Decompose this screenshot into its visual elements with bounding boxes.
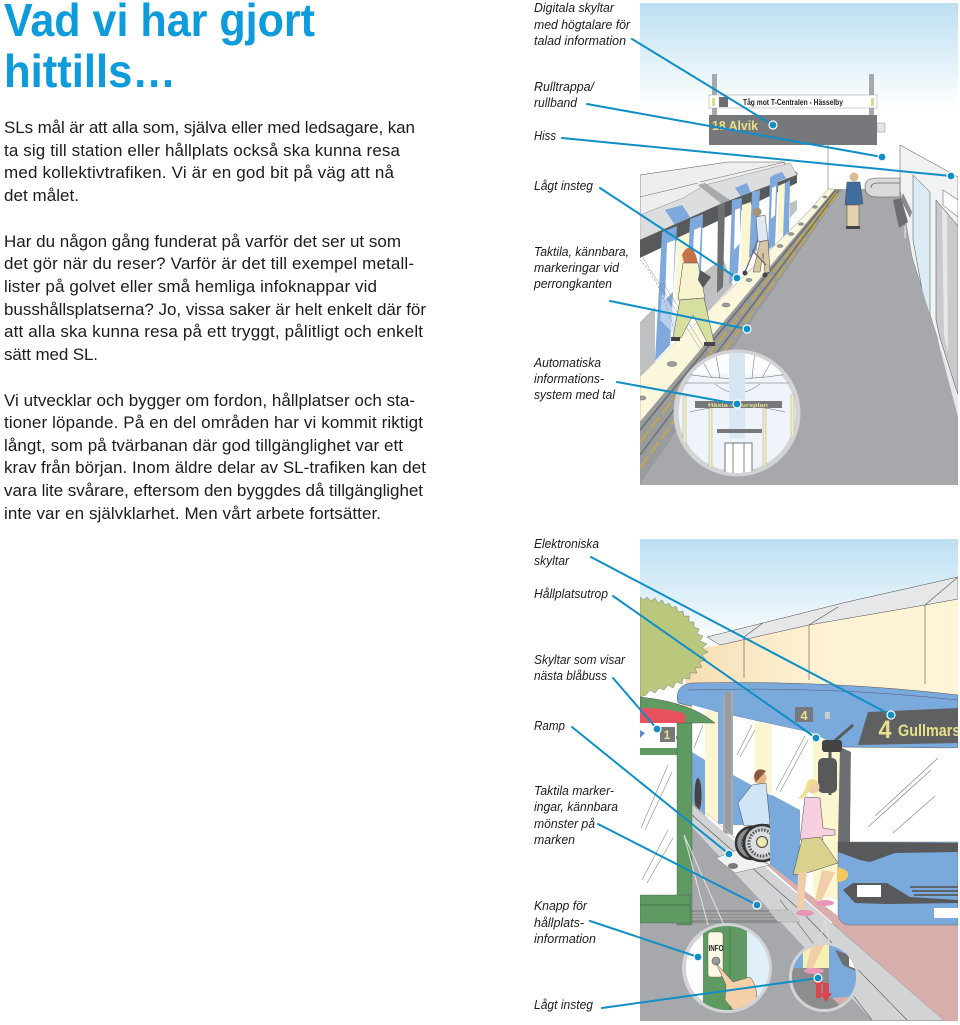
title — [4, 0, 315, 97]
label group: metro platform: Lågt insteg — [534, 178, 594, 193]
intro paragraph — [4, 118, 415, 205]
bus shelter — [640, 697, 715, 925]
illustration: bus stop — [640, 539, 960, 1021]
label group: bus stop: Taktila marker- — [534, 783, 615, 798]
label group: metro platform: markeringar vid — [534, 260, 620, 275]
intro paragraph: det målet. — [4, 186, 79, 205]
intro paragraph: ta sig till station eller hållplats också ska kunna resa — [4, 141, 401, 160]
label group: bus stop: Hållplatsutrop — [534, 586, 608, 601]
intro paragraph: med kollektivtrafiken. Vi är en god bit på väg att nå — [4, 163, 395, 182]
bus side — [677, 682, 958, 900]
paragraph: why things look as they do: att alla ska kunna resa på ett tryggt, pålitligt och enkelt — [4, 322, 423, 341]
label group: bus stop: Skyltar som visar — [534, 652, 626, 667]
label group: bus stop: Lågt insteg — [534, 997, 594, 1012]
label group: metro platform — [533, 0, 631, 402]
label group: metro platform: system med tal — [534, 387, 616, 402]
label group: metro platform: informations- — [534, 371, 605, 386]
label group: bus stop: skyltar — [534, 553, 570, 568]
magnifier: info button — [684, 925, 772, 1015]
magnifier: info button: INFO — [708, 944, 724, 953]
label group: bus stop: Ramp — [534, 718, 565, 733]
label group: metro platform: perrongkanten — [533, 276, 612, 291]
leader lines: bus stop — [572, 557, 895, 1008]
magnifier: in-train information display: Hästa - Djursplan — [708, 403, 768, 409]
label group: bus stop: mönster på — [534, 816, 595, 831]
bus shelter: 1 — [664, 728, 671, 742]
label group: bus stop: nästa blåbuss — [534, 668, 607, 683]
paragraph: why things look as they do: busshållsplatserna? Jo, vissa saker är helt enkelt där för — [4, 300, 426, 319]
person: man waiting — [845, 172, 863, 229]
label group: bus stop: Elektroniska — [534, 536, 599, 551]
bench — [893, 193, 912, 238]
paragraph: why things look as they do: det gör när du reser? Varför är det till exempel metall- — [4, 254, 414, 273]
person: woman walking — [671, 248, 715, 346]
paragraph: why things look as they do: lister på golvet eller små hemliga infoknappar vid — [4, 277, 377, 296]
paragraph: why things look as they do — [4, 232, 426, 364]
label group: bus stop: marken — [534, 832, 575, 847]
paragraph: ongoing work: inte var en självklarhet. Men vårt arbete fortsätter. — [4, 504, 381, 523]
label group: bus stop: hållplats- — [534, 915, 585, 930]
paragraph: ongoing work: Vi utvecklar och bygger om fordon, hållplatser och sta- — [4, 391, 415, 410]
ground — [640, 800, 958, 1021]
label group: metro platform: rullband — [534, 95, 578, 110]
paragraph: why things look as they do: sätt med SL. — [4, 345, 98, 364]
paragraph: why things look as they do: Har du någon gång funderat på varför det ser ut som — [4, 232, 401, 251]
intro paragraph: SLs mål är att alla som, själva eller med ledsagare, kan — [4, 118, 415, 137]
paragraph: ongoing work: långt, som på tvärbanan där god tillgänglighet var ett — [4, 436, 403, 455]
title: hittills… — [4, 45, 176, 97]
escalator — [865, 178, 900, 197]
overhead signs: 18 Alvik — [712, 118, 759, 133]
label group: bus stop: ingar, kännbara — [534, 799, 618, 814]
overhead signs: Tåg mot T-Centralen - Hässelby — [743, 98, 843, 107]
lines to magnifiers — [684, 835, 830, 946]
leader lines: metro platform — [562, 39, 955, 408]
train — [640, 162, 797, 377]
label group: bus stop: Knapp för — [534, 898, 588, 913]
label group: metro platform: Digitala skyltar — [534, 0, 615, 15]
tactile strip — [640, 189, 843, 485]
bus windscreen and mirror — [818, 725, 958, 843]
magnifier: low step — [790, 944, 858, 1010]
dashed door outline — [640, 258, 712, 360]
cream platform edge — [640, 189, 835, 422]
platform studs — [638, 196, 827, 400]
label group: metro platform: Automatiska — [533, 355, 601, 370]
person: wheelchair user — [734, 769, 770, 862]
person: woman boarding — [793, 779, 838, 916]
illustration: right wall and elevator — [900, 145, 958, 440]
label group: bus stop: information — [534, 931, 596, 946]
label group: metro platform: Taktila, kännbara, — [534, 244, 629, 259]
paragraph: ongoing work: krav från början. Inom äldre delar av SL-trafiken kan det — [4, 458, 426, 477]
paragraph: ongoing work — [4, 391, 426, 523]
paragraph: ongoing work: vara lite svårare, eftersom den byggdes då tillgänglighet — [4, 481, 423, 500]
overhead signs — [709, 74, 885, 145]
person: man with walker — [742, 208, 770, 278]
bus shelter: min — [676, 735, 685, 741]
bus destination sign — [858, 708, 960, 745]
illustration: metro platform — [638, 3, 958, 485]
label group: metro platform: med högtalare för — [534, 17, 631, 32]
label group: metro platform: Hiss — [534, 128, 556, 143]
label group: metro platform: talad information — [534, 33, 626, 48]
bus destination sign: 4 — [878, 716, 892, 744]
building — [680, 577, 958, 720]
bus front — [837, 842, 958, 925]
paragraph: ongoing work: tioner löpande. På en del områden har vi kommit riktigt — [4, 413, 423, 432]
bus side: 4 — [800, 708, 808, 723]
tree — [640, 597, 708, 697]
magnifier: in-train information display — [676, 350, 798, 478]
label group: bus stop — [534, 536, 626, 1012]
platform floor — [640, 189, 958, 485]
label group: metro platform: Rulltrappa/ — [534, 79, 595, 94]
